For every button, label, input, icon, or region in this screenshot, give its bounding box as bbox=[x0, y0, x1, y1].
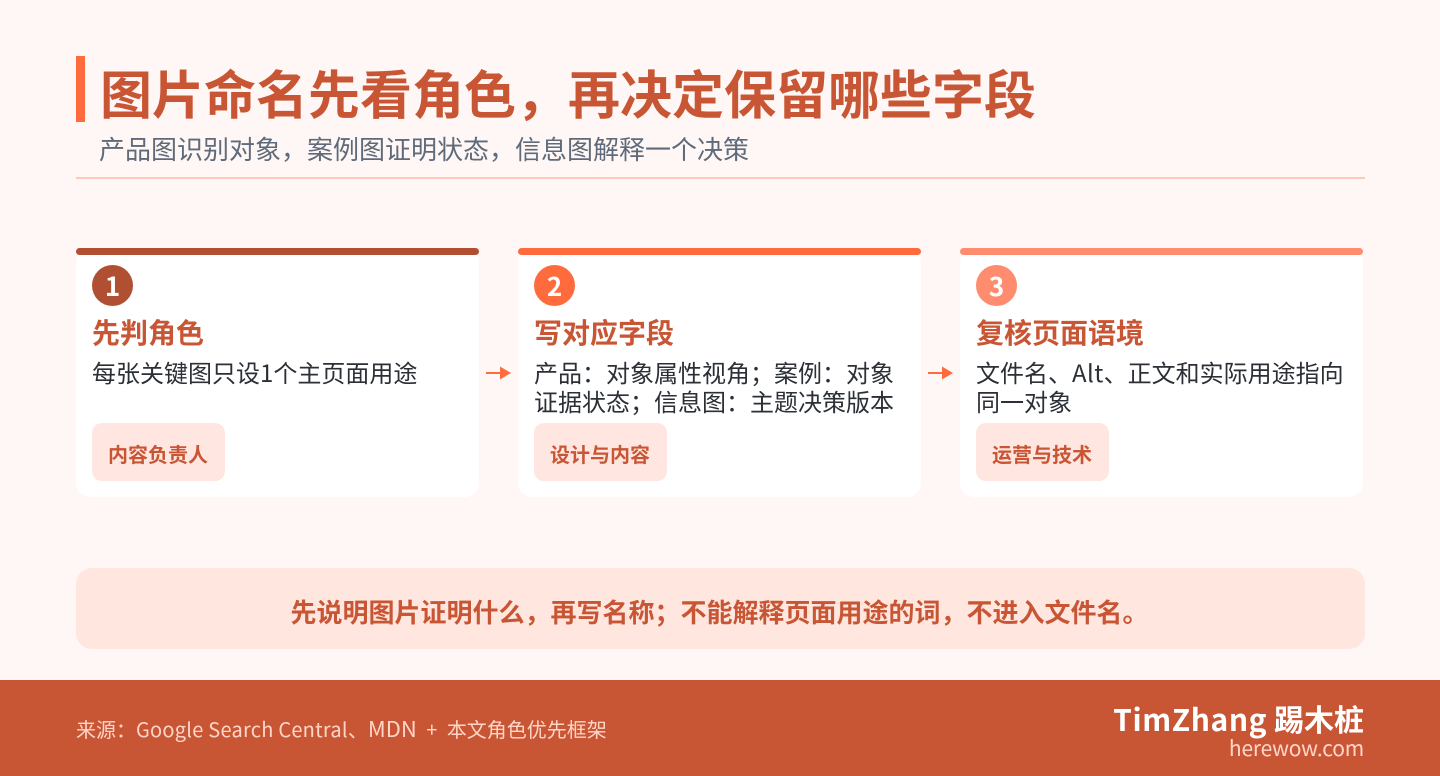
step number 3: 3 bbox=[989, 267, 1004, 304]
card 2 top bar bbox=[518, 248, 921, 255]
card 1 owner tag: 内容负责人 bbox=[108, 439, 208, 468]
card 3 heading: 复核页面语境 bbox=[976, 312, 1144, 352]
card 2 text bbox=[534, 354, 894, 418]
step number 1 bbox=[92, 265, 133, 306]
card 1 top bar bbox=[76, 248, 479, 255]
card 2 owner tag bbox=[534, 423, 667, 481]
card 3 owner tag: 运营与技术 bbox=[992, 439, 1092, 468]
step number 1: 1 bbox=[105, 267, 120, 304]
arrow: step 2 to 3 bbox=[928, 366, 953, 380]
card 3 text: 文件名、Alt、正文和实际用途指向 bbox=[976, 354, 1344, 389]
card 2 text: 产品：对象属性视角；案例：对象 bbox=[534, 354, 894, 389]
card 1 heading: 先判角色 bbox=[92, 312, 204, 352]
step number 3 bbox=[976, 265, 1017, 306]
card 2 text: 证据状态；信息图：主题决策版本 bbox=[534, 383, 894, 418]
step number 2 bbox=[534, 265, 575, 306]
source note: 来源：Google Search Central、MDN + 本文角色优先框架 bbox=[76, 712, 607, 744]
card 3 top bar bbox=[960, 248, 1363, 255]
subtitle: 产品图识别对象，案例图证明状态，信息图解释一个决策 bbox=[99, 130, 749, 167]
callout: 先说明图片证明什么，再写名称；不能解释页面用途的词，不进入文件名。 bbox=[290, 593, 1148, 630]
title: 图片命名先看角色，再决定保留哪些字段 bbox=[100, 54, 1036, 129]
site url: herewow.com bbox=[1229, 733, 1364, 763]
card 2 heading: 写对应字段 bbox=[534, 312, 674, 352]
arrow: step 1 to 2 bbox=[486, 366, 511, 380]
card 3 text bbox=[976, 354, 1344, 418]
card 3 text: 同一对象 bbox=[976, 383, 1072, 418]
card 3 owner tag bbox=[976, 423, 1109, 481]
step number 2: 2 bbox=[547, 267, 562, 304]
brand name: TimZhang 踢木桩 bbox=[1113, 696, 1364, 740]
panel: step 1 bbox=[76, 248, 479, 497]
title accent bar bbox=[76, 56, 85, 122]
callout bbox=[76, 568, 1365, 649]
card 2 owner tag: 设计与内容 bbox=[550, 439, 650, 468]
footer band bbox=[0, 680, 1440, 776]
panel: step 2 bbox=[518, 248, 921, 497]
header divider bbox=[76, 177, 1365, 179]
card 1 owner tag bbox=[92, 423, 225, 481]
panel: step 3 bbox=[960, 248, 1363, 497]
card 1 text: 每张关键图只设1个主页面用途 bbox=[92, 354, 417, 389]
